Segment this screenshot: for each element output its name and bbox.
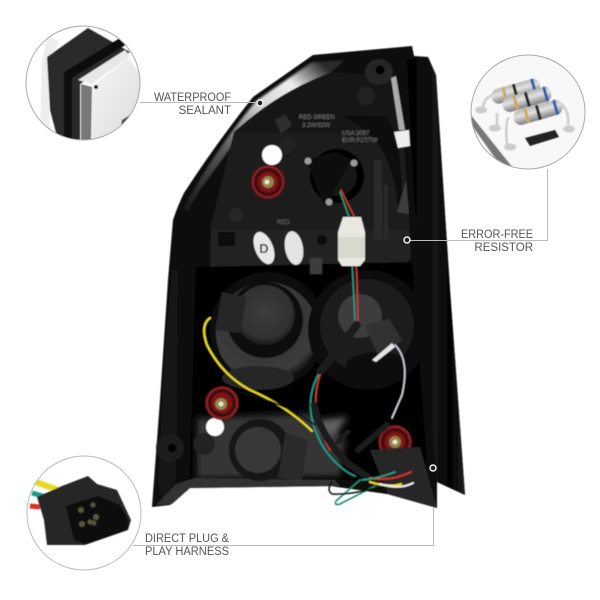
reflector highlight — [318, 417, 347, 436]
inset: sealant detail — [26, 26, 145, 145]
label: error-free resistor — [461, 229, 533, 254]
pads — [475, 106, 487, 114]
red bulb grommets — [205, 165, 412, 459]
connector tab — [370, 447, 437, 508]
inset: plug detail — [27, 456, 141, 570]
panel embossed details: RED — [277, 220, 290, 226]
tail light assembly — [152, 46, 465, 508]
lower socket — [193, 419, 308, 481]
callout line: error-free resistor — [404, 169, 548, 243]
glare band along upper edge — [183, 60, 345, 212]
large rear bulb — [210, 272, 326, 390]
lower cavity — [190, 262, 428, 480]
resistor legs — [482, 88, 568, 145]
label: direct plug and play harness — [145, 533, 229, 558]
light pane — [92, 58, 140, 138]
white label D: D — [259, 241, 269, 256]
label: direct plug and play harness: PLAY HARNESS — [145, 546, 229, 558]
upper panel — [210, 72, 411, 267]
panel embossed details: 3.2W/32W — [302, 123, 330, 129]
white label D — [249, 229, 279, 267]
callout line: harness — [133, 465, 436, 546]
inset: resistor detail — [468, 55, 585, 172]
callout line: waterproof sealant — [140, 100, 263, 106]
white holes — [206, 76, 410, 436]
white label oval — [282, 230, 306, 266]
wiring harness — [204, 190, 413, 505]
label: direct plug and play harness: DIRECT PLUG & — [145, 533, 229, 545]
panel embossed details: USA:3057 — [342, 131, 370, 137]
housing body — [152, 46, 465, 508]
plug body — [37, 476, 131, 545]
panel embossed details: EUR:P27/7W — [342, 138, 378, 144]
grommet top — [365, 59, 393, 85]
reflector light region — [197, 414, 345, 478]
wire stubs — [36, 482, 58, 490]
grey inner strip — [81, 84, 92, 140]
left lower wall — [158, 270, 178, 500]
bottom ledge — [156, 478, 340, 505]
label: error-free resistor: RESISTOR — [474, 242, 533, 254]
resistors — [490, 77, 564, 127]
label: waterproof sealant — [154, 92, 231, 117]
right side wall — [407, 57, 465, 495]
label: waterproof sealant: SEALANT — [179, 105, 231, 117]
right bulb — [308, 270, 428, 390]
left grommet lower — [156, 434, 184, 462]
pale left strip — [40, 37, 60, 128]
label: waterproof sealant: WATERPROOF — [154, 92, 231, 104]
pins — [78, 502, 99, 527]
panel embossed details: RED GREEN — [299, 115, 335, 121]
chip — [525, 130, 559, 146]
panel embossed details — [218, 87, 410, 274]
label: error-free resistor: ERROR-FREE — [461, 229, 533, 241]
white inline connector — [338, 217, 365, 266]
dark frame — [47, 28, 130, 140]
